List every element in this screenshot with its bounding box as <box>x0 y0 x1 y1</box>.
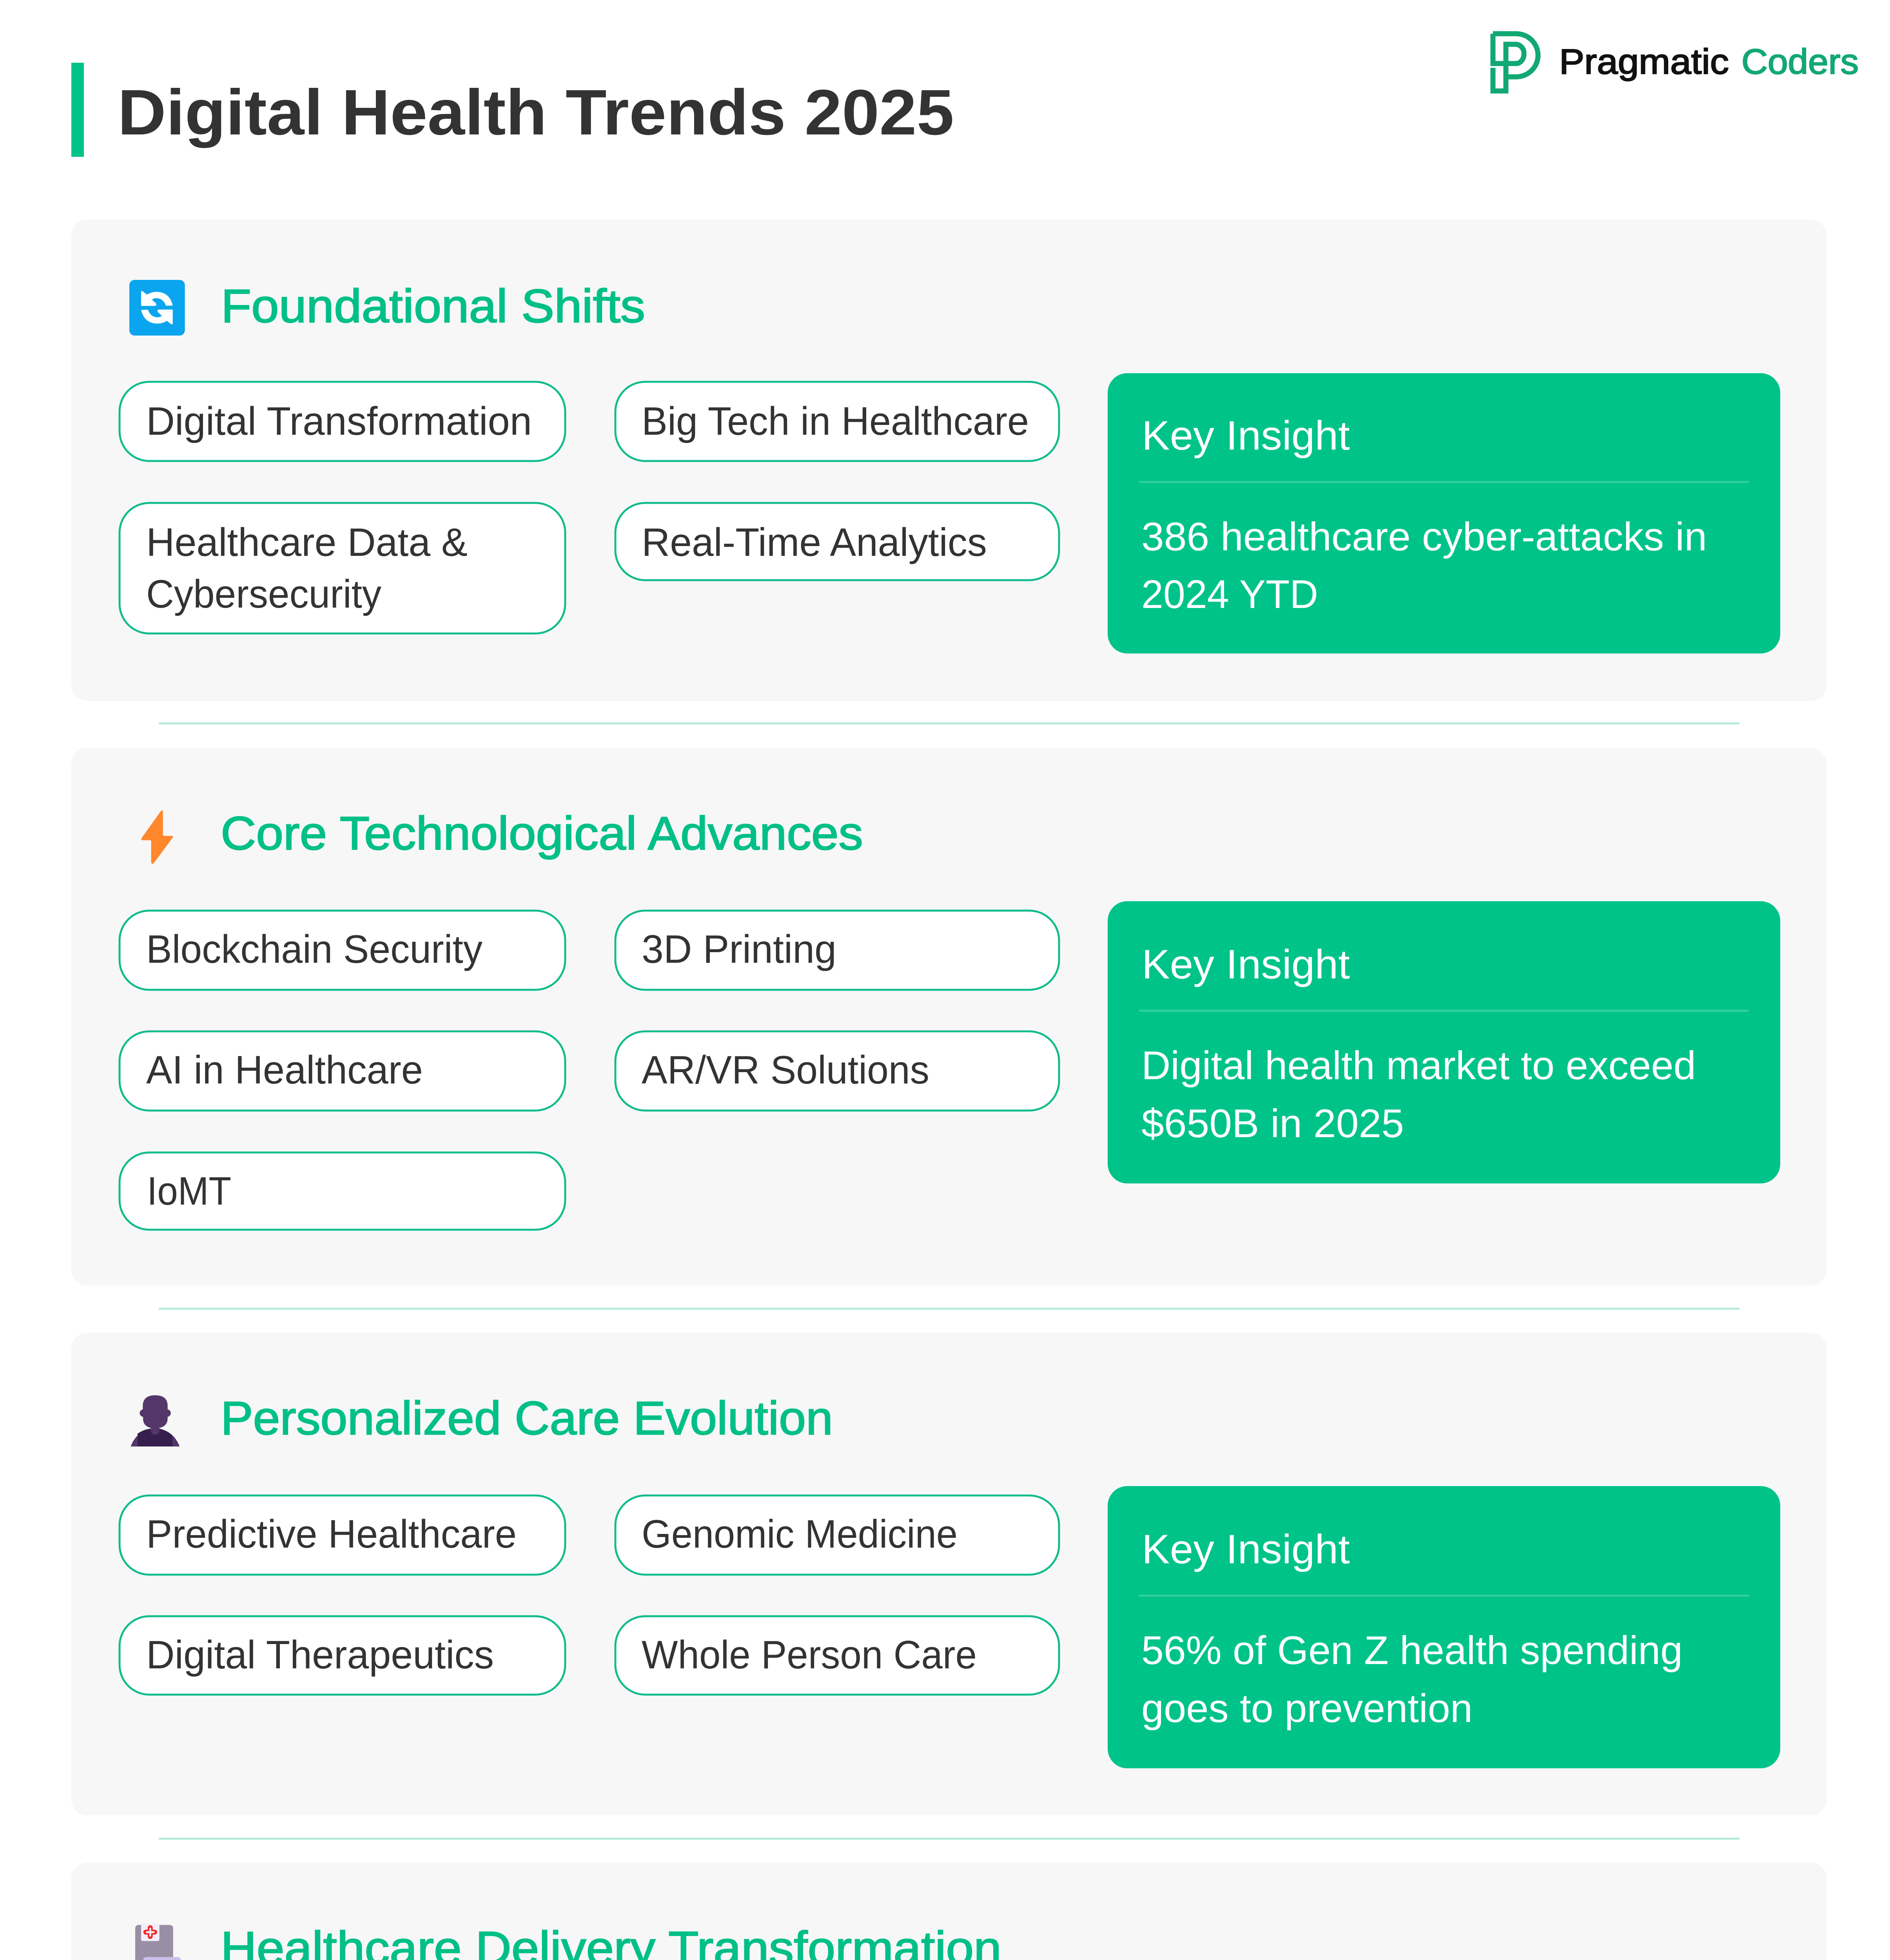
logo mark <box>1493 34 1538 91</box>
chip: Healthcare Data & Cybersecurity <box>120 503 565 633</box>
logo wordmark: Pragmatic <box>1559 42 1729 82</box>
title accent bar <box>71 63 84 157</box>
chip: AR/VR Solutions: AR/VR Solutions <box>642 1048 929 1092</box>
section heading: Foundational Shifts <box>221 280 645 332</box>
section heading: Personalized Care Evolution <box>221 1392 833 1445</box>
callout: key insight: Key Insight <box>1142 1526 1350 1572</box>
chip: Big Tech in Healthcare <box>615 382 1059 461</box>
chip: Digital Therapeutics: Digital Therapeutics <box>146 1633 494 1677</box>
chip: Big Tech in Healthcare: Big Tech in Healthcare <box>642 399 1029 443</box>
icon: lightning bolt <box>141 811 173 864</box>
callout: key insight: $650B in 2025 <box>1141 1101 1404 1146</box>
callout: key insight: 56% of Gen Z health spending <box>1141 1628 1683 1673</box>
chip: Blockchain Security <box>120 911 565 990</box>
section heading: Core Technological Advances <box>221 807 863 860</box>
chip: 3D Printing: 3D Printing <box>642 927 836 971</box>
chip: Blockchain Security: Blockchain Security <box>146 927 482 971</box>
chip: IoMT <box>120 1152 565 1230</box>
panel: Personalized Care Evolution <box>71 1333 1827 1815</box>
title block <box>71 63 954 157</box>
panel: Healthcare Delivery Transformation <box>71 1862 1827 1960</box>
title: Digital Health Trends 2025 <box>118 76 954 148</box>
callout: key insight <box>1108 901 1780 1183</box>
icon: hospital <box>135 1924 181 1960</box>
callout: key insight <box>1108 373 1780 653</box>
chip: Whole Person Care: Whole Person Care <box>642 1633 977 1677</box>
chip: Whole Person Care <box>615 1616 1059 1695</box>
chip: AI in Healthcare <box>120 1031 565 1111</box>
chip: Digital Transformation <box>120 382 565 461</box>
callout: key insight: Key Insight <box>1142 413 1350 459</box>
chip: Digital Transformation: Digital Transformation <box>146 399 532 443</box>
panel: Foundational Shifts <box>71 220 1827 701</box>
chip: Genomic Medicine <box>615 1495 1059 1575</box>
chip: Real-Time Analytics: Real-Time Analytics <box>642 521 987 564</box>
panel: Core Technological Advances <box>71 748 1827 1286</box>
logo: Pragmatic Coders <box>1493 34 1859 91</box>
chip: AR/VR Solutions <box>615 1031 1059 1111</box>
callout: key insight: 386 healthcare cyber-attacks in <box>1141 514 1707 559</box>
logo: Pragmatic Coders: Coders <box>1741 42 1859 82</box>
callout: key insight: goes to prevention <box>1141 1686 1473 1731</box>
callout: key insight <box>1108 1486 1780 1768</box>
callout: key insight: 2024 YTD <box>1141 572 1318 617</box>
chip: Healthcare Data & Cybersecurity: Cybersecurity <box>146 572 381 616</box>
chip: Genomic Medicine: Genomic Medicine <box>642 1512 958 1556</box>
chip: Real-Time Analytics <box>615 503 1059 580</box>
chip: AI in Healthcare: AI in Healthcare <box>146 1048 423 1092</box>
chip: Predictive Healthcare <box>120 1495 565 1575</box>
icon: person <box>131 1395 180 1446</box>
chip: 3D Printing <box>615 911 1059 990</box>
chip: Healthcare Data & Cybersecurity: Healthcare Data & <box>146 521 468 564</box>
callout: key insight: Digital health market to exceed <box>1141 1043 1696 1088</box>
chip: Predictive Healthcare: Predictive Healthcare <box>146 1512 517 1556</box>
chip: Digital Therapeutics <box>120 1616 565 1695</box>
icon: refresh arrows <box>129 280 185 336</box>
callout: key insight: Key Insight <box>1142 942 1350 987</box>
chip: IoMT: IoMT <box>147 1169 231 1213</box>
